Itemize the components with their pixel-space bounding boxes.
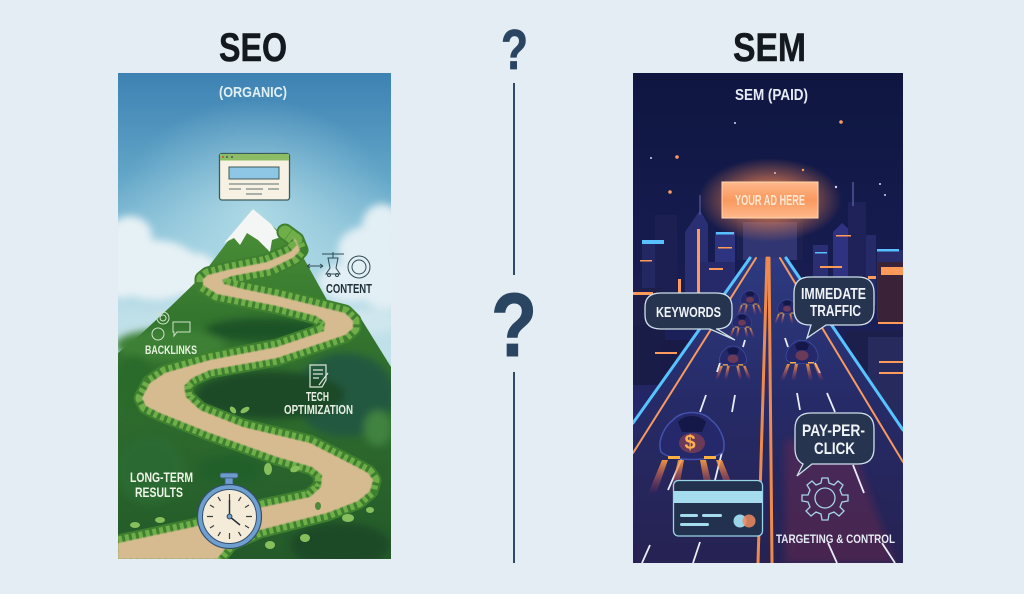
label: tech optimization: TECH <box>306 389 329 404</box>
label: SEM paid: SEM (PAID) <box>735 87 808 104</box>
panel: SEO organic mountain <box>118 73 391 559</box>
lane dashes <box>642 338 895 563</box>
car <box>737 291 763 315</box>
speech bubble: pay-per-click: CLICK <box>814 439 856 458</box>
speech bubble: immediate traffic: IMMEDATE <box>801 286 866 303</box>
night sky <box>633 73 903 428</box>
mountain shading <box>115 318 395 567</box>
label: backlinks: BACKLINKS <box>145 343 197 357</box>
large question mark: ? <box>491 276 537 376</box>
title: SEO: SEO <box>219 26 287 70</box>
mountain <box>118 209 391 559</box>
speech bubble: immediate traffic <box>794 277 874 338</box>
backlinks icons <box>152 312 190 340</box>
gear icon <box>802 478 848 520</box>
document icon <box>310 365 328 387</box>
billboard <box>698 158 842 260</box>
label: targeting and control: TARGETING & CONTROL <box>776 532 895 546</box>
title: SEM: SEM <box>733 26 806 70</box>
label: long-term results: LONG-TERM <box>130 469 193 485</box>
sky <box>118 73 391 367</box>
credit card icon <box>674 480 762 536</box>
speech bubble: immediate traffic: TRAFFIC <box>810 303 861 320</box>
vertical line upper <box>513 83 515 275</box>
car <box>715 346 751 380</box>
small question mark: ? <box>501 18 528 82</box>
content icons <box>307 252 370 278</box>
city skyline <box>633 182 903 417</box>
large car with dollar sign: $ <box>684 432 696 454</box>
browser window icon <box>220 154 290 200</box>
neon road lines <box>633 258 903 563</box>
winding path <box>118 232 373 559</box>
highway <box>633 258 903 563</box>
label: organic: (ORGANIC) <box>219 84 287 101</box>
vertical line lower <box>513 372 515 563</box>
center divider with question marks <box>491 18 537 563</box>
leaves <box>130 405 374 549</box>
billboard text: YOUR AD HERE <box>735 192 805 209</box>
snow cap <box>224 209 281 252</box>
stars <box>650 120 886 196</box>
panel: SEM paid highway <box>633 73 903 563</box>
speech bubble: keywords: KEYWORDS <box>656 304 721 321</box>
winding hedge <box>118 232 373 559</box>
speech bubble: keywords <box>645 293 735 340</box>
stopwatch icon <box>198 473 262 548</box>
label: content: CONTENT <box>326 281 372 296</box>
large car with dollar sign <box>648 412 736 494</box>
speech bubble: pay-per-click <box>795 413 874 476</box>
car <box>774 300 800 324</box>
clouds right <box>315 199 391 333</box>
label: tech optimization: OPTIMIZATION <box>284 402 353 417</box>
label: long-term results: RESULTS <box>135 484 183 500</box>
clouds left <box>118 211 216 304</box>
car <box>780 340 824 381</box>
distant cars <box>729 314 755 338</box>
speech bubble: pay-per-click: PAY-PER- <box>802 421 865 440</box>
